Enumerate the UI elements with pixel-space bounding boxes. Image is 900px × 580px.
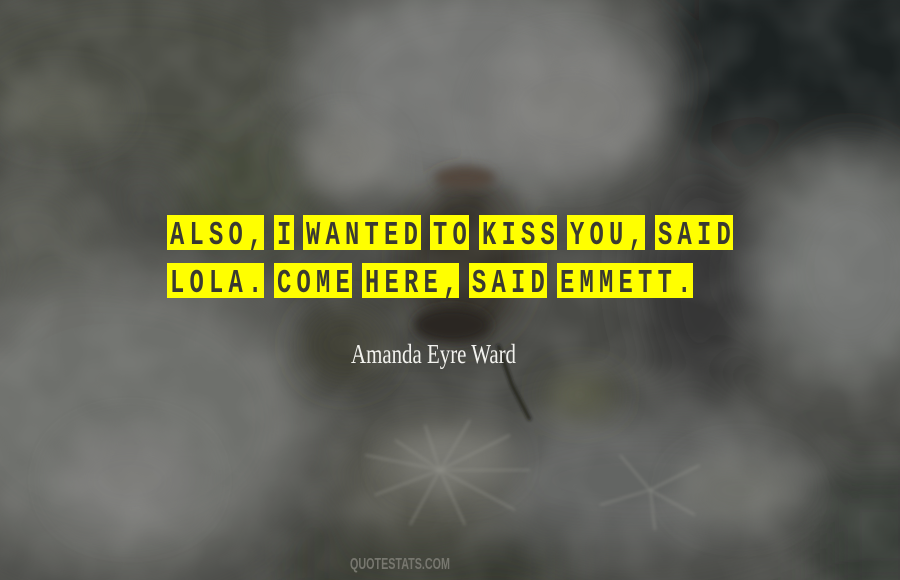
watermark: QUOTESTATS.COM — [350, 556, 450, 573]
word box: KISS: KISS — [482, 216, 560, 254]
word box: ALSO,: ALSO, — [170, 216, 268, 254]
word box: WANTED: WANTED — [306, 216, 423, 254]
word box: HERE,: HERE, — [365, 264, 463, 302]
word box: COME: COME — [277, 264, 355, 302]
word box: SAID: SAID — [658, 216, 736, 254]
author name: Amanda Eyre Ward — [351, 339, 516, 369]
word box: TO: TO — [433, 216, 472, 254]
quote text: line 1 — [167, 215, 736, 254]
word box: I: I — [277, 216, 297, 254]
flower stamens — [365, 420, 700, 530]
bee leg — [498, 345, 530, 420]
word box: EMMETT.: EMMETT. — [560, 264, 697, 302]
word box: SAID: SAID — [472, 264, 550, 302]
word box: LOLA.: LOLA. — [170, 264, 268, 302]
word box: YOU,: YOU, — [570, 216, 648, 254]
quote text: line 2 — [167, 263, 697, 302]
